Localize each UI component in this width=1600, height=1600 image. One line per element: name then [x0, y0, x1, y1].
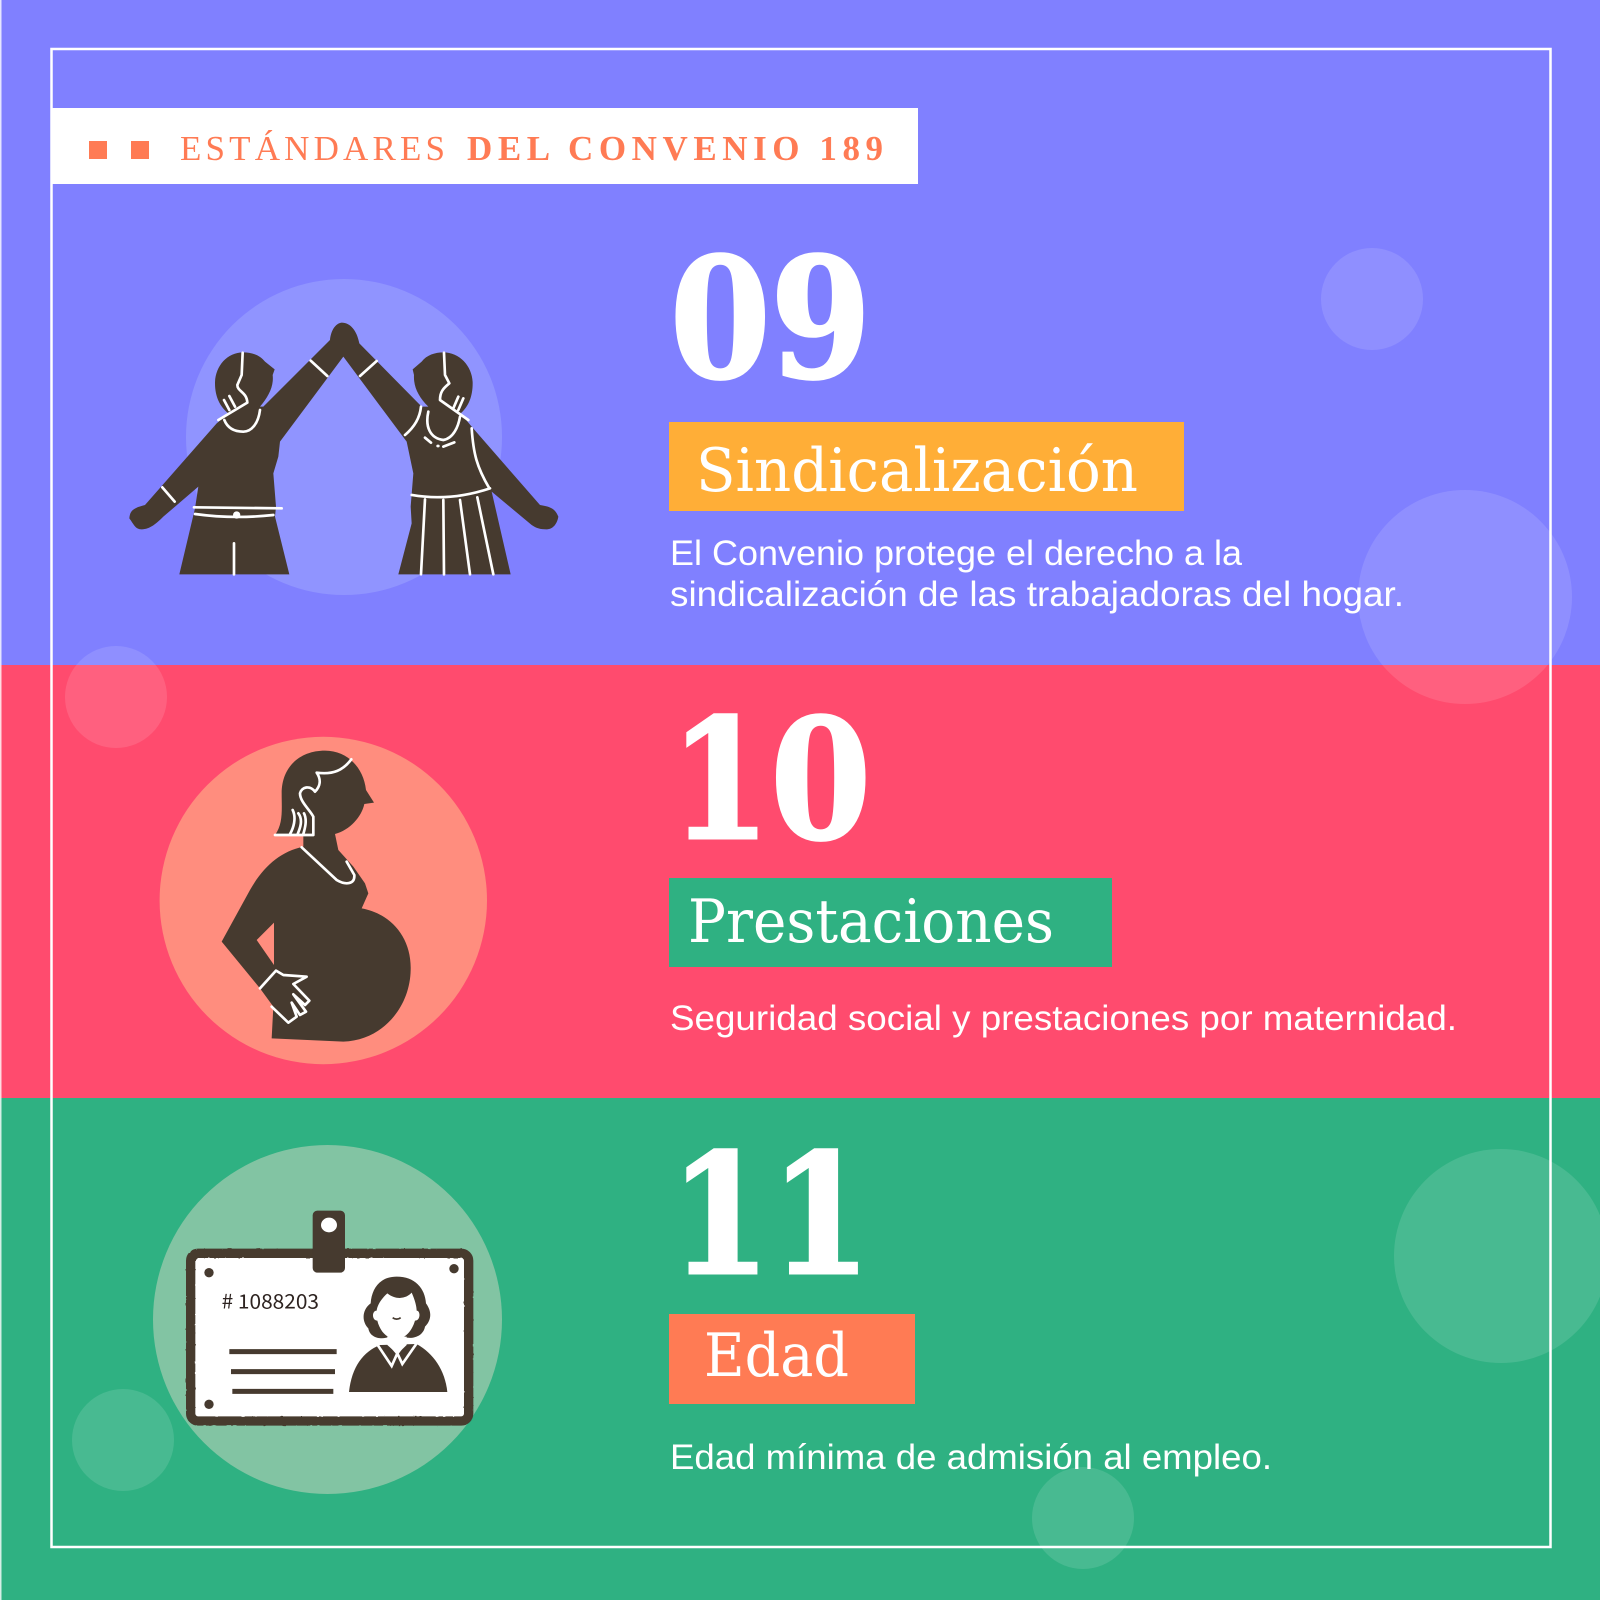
left edge hairline	[0, 0, 2, 1600]
panel: 11 Edad	[0, 1098, 1600, 1600]
description: edad: Edad mínima de admisión al empleo.	[670, 1438, 1272, 1477]
number 09: 09	[670, 222, 871, 417]
label: Prestaciones: Prestaciones	[688, 887, 1054, 957]
icon: pregnant woman	[160, 737, 487, 1064]
panel: 10 Prestaciones	[0, 665, 1600, 1098]
title banner: ESTÁNDARES	[180, 129, 445, 168]
number 10: 10	[670, 683, 871, 878]
description: sindicalización: sindicalización de las trabajadoras del hogar.	[670, 575, 1404, 614]
description: prestaciones: Seguridad social y prestaciones por maternidad.	[670, 999, 1457, 1038]
icon: ID badge	[153, 1145, 502, 1494]
title banner: DEL CONVENIO 189	[467, 129, 883, 168]
label: Prestaciones	[669, 878, 1112, 967]
label: Edad	[669, 1314, 915, 1404]
label: Sindicalización: Sindicalización	[696, 436, 1138, 506]
description: sindicalización: El Convenio protege el derecho a la	[670, 534, 1243, 573]
icon: two women joining raised hands	[129, 279, 558, 595]
panel: 09 Sindicalización	[0, 0, 1600, 665]
title banner	[52, 108, 918, 184]
label: Edad: Edad	[704, 1321, 849, 1391]
description: sindicalización	[670, 534, 1404, 614]
number 11: 11	[670, 1118, 871, 1313]
icon: ID badge: # 1088203	[222, 1285, 319, 1314]
decorative translucent circles	[65, 248, 1600, 1569]
